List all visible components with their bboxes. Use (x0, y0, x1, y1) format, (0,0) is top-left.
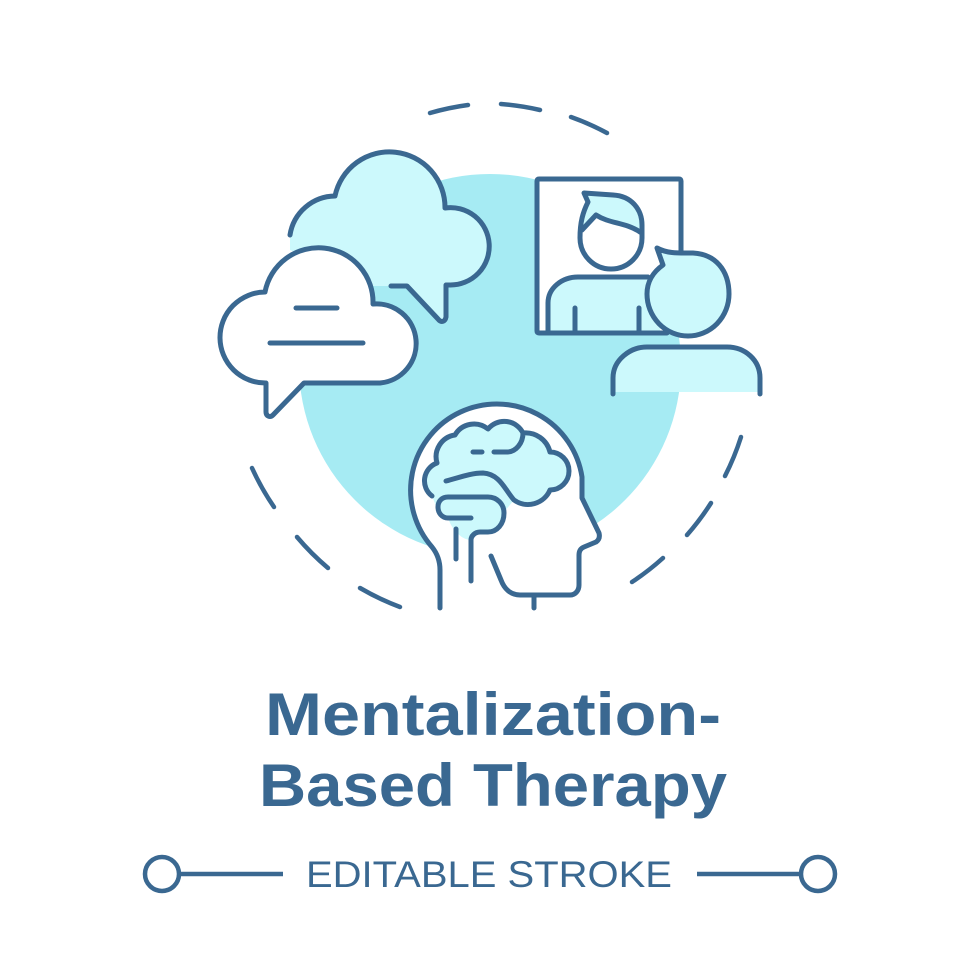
portrait body (548, 277, 660, 333)
title: Mentalization- (265, 681, 721, 748)
footer left connector (145, 857, 283, 891)
cerebellum and brain stem (438, 497, 504, 581)
portrait head (580, 193, 642, 269)
icon: lower speech cloud (220, 248, 416, 416)
dashed outer ring (252, 104, 741, 607)
icon: portrait frame (537, 179, 681, 333)
text lines in cloud (270, 308, 363, 343)
footer label: EDITABLE STROKE (306, 854, 672, 895)
title (259, 681, 728, 819)
front person body (613, 347, 760, 392)
brain fill (424, 421, 569, 540)
footer: editable stroke (145, 854, 835, 895)
head fill (411, 404, 599, 608)
icon: head with brain (411, 404, 599, 608)
front person head (647, 248, 729, 336)
footer right connector (697, 857, 835, 891)
background circle (299, 174, 681, 556)
title: Based Therapy (259, 752, 728, 819)
icon: upper speech cloud (290, 152, 489, 321)
head outline (411, 404, 599, 608)
icon: front person (613, 248, 760, 394)
portrait hair (581, 193, 642, 232)
brain outline (424, 421, 569, 504)
